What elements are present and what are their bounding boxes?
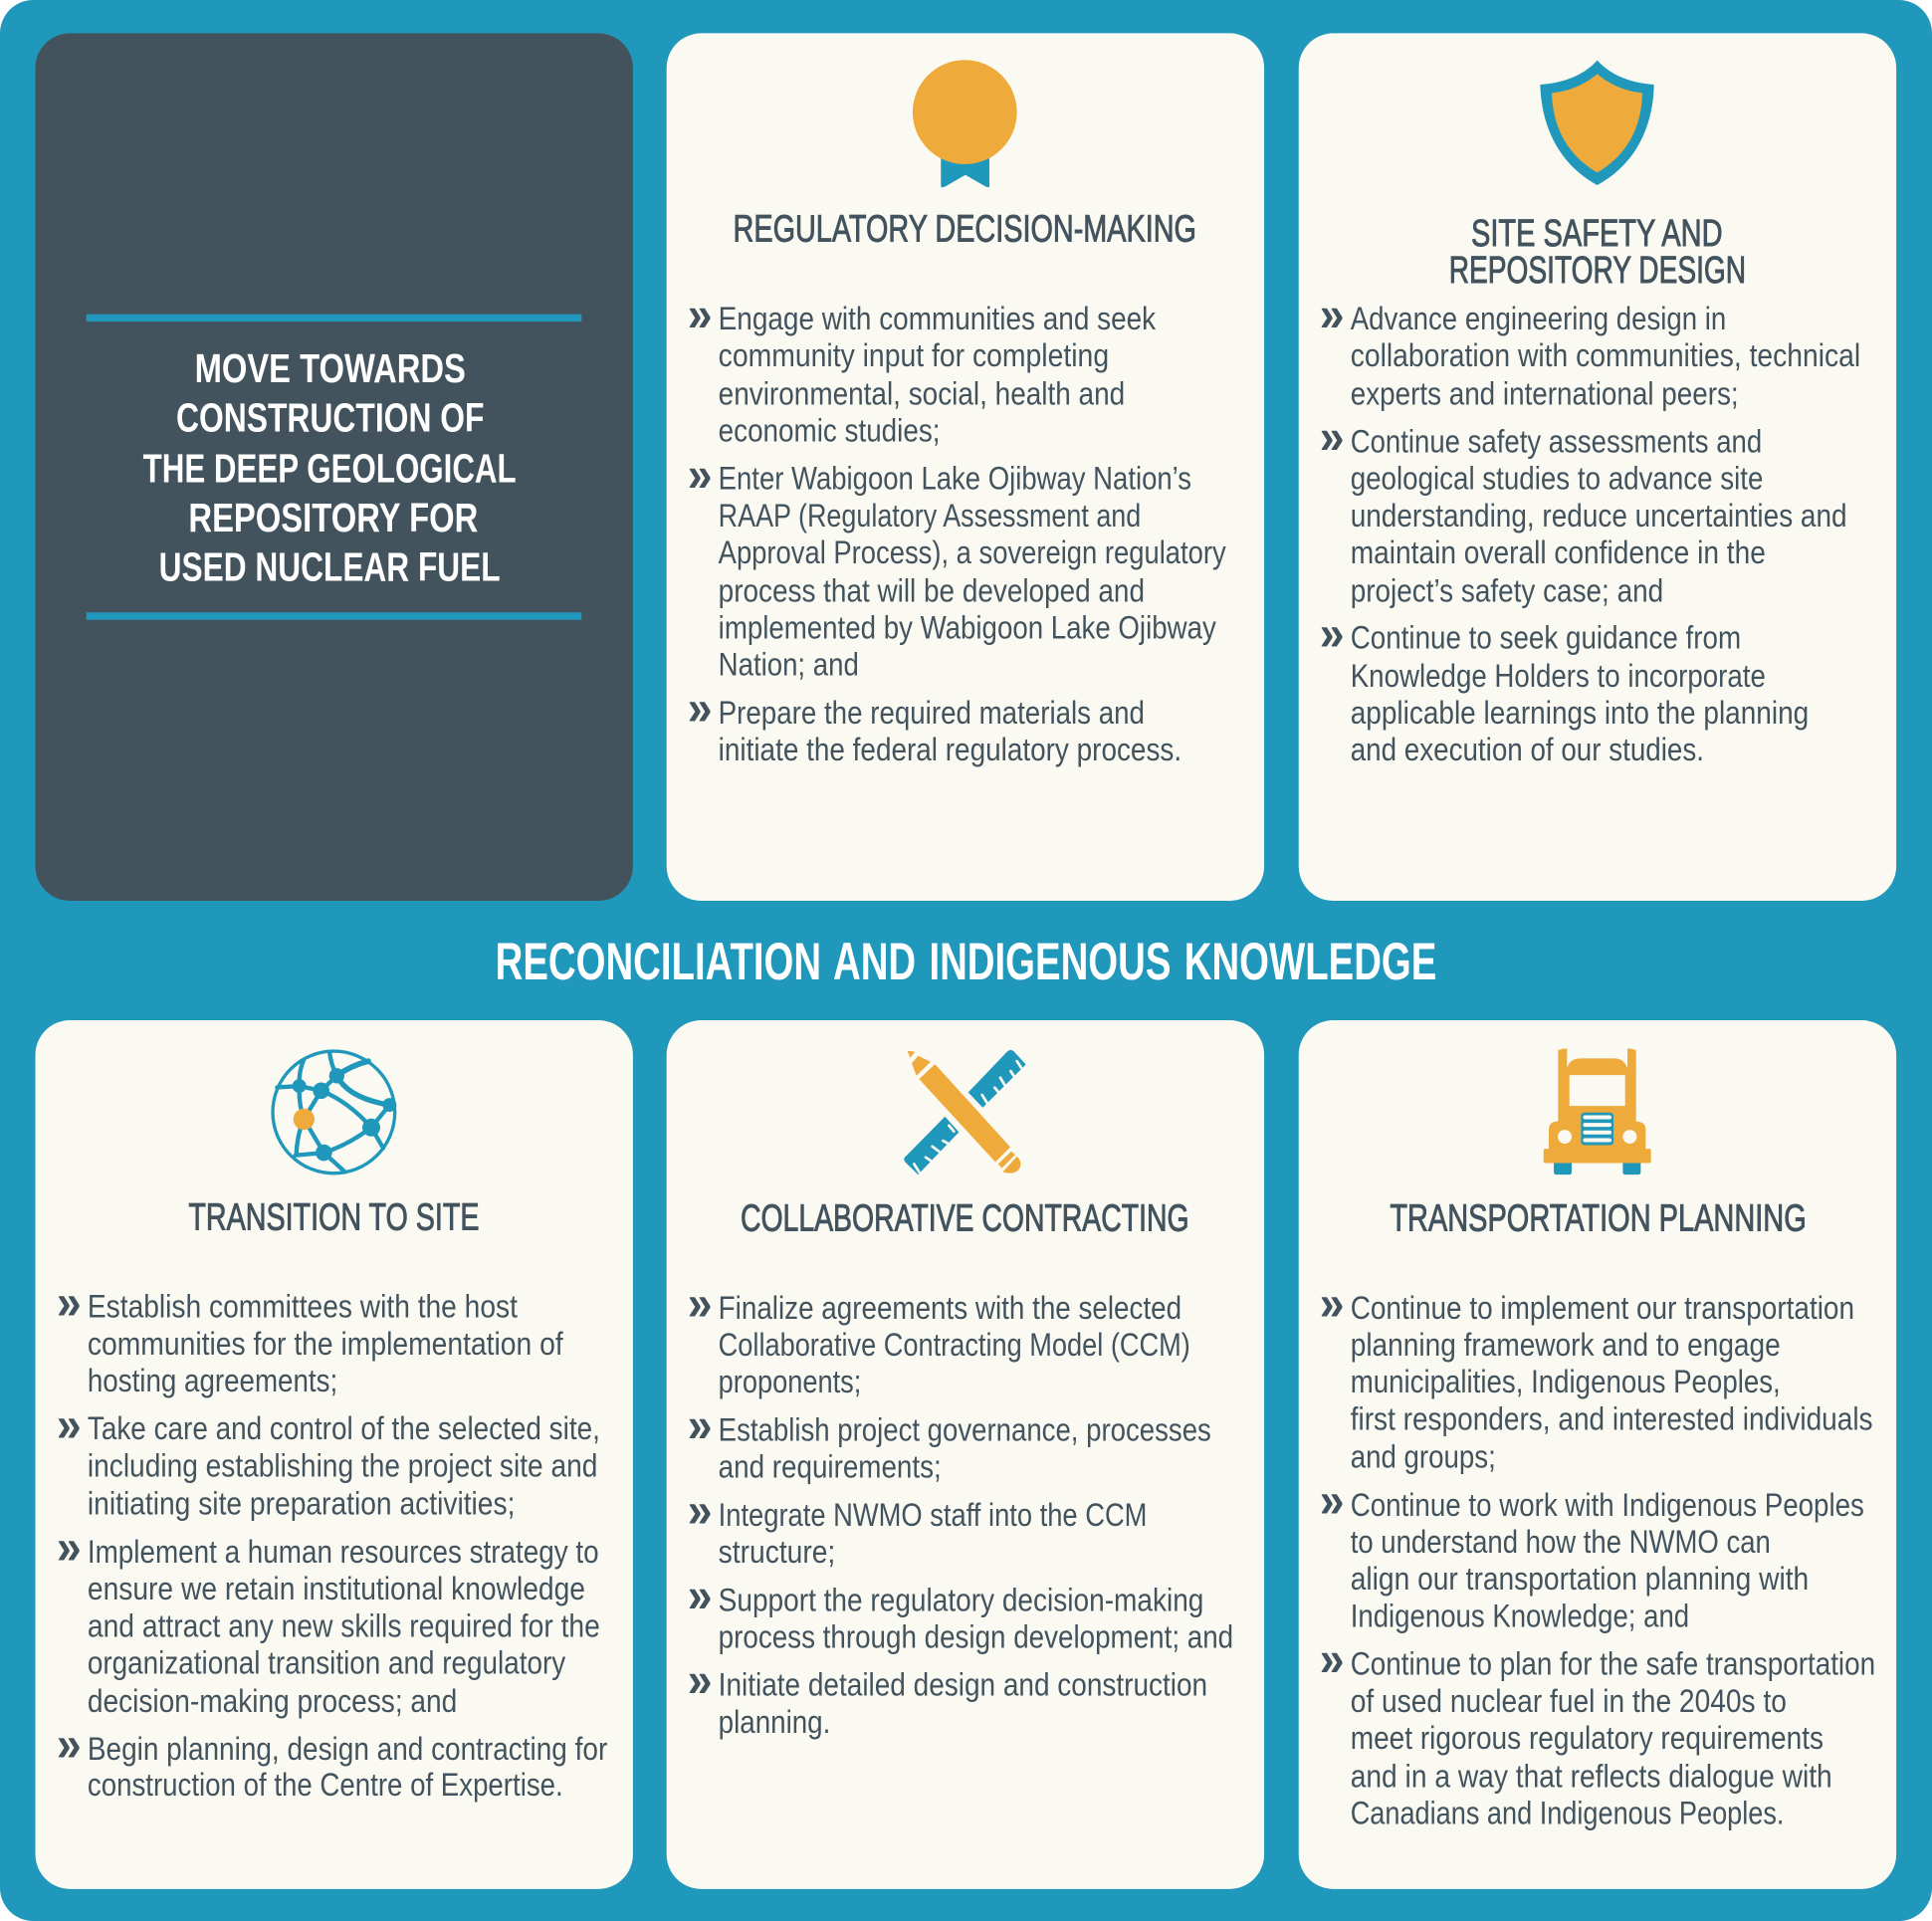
bullet 1 xyxy=(1320,287,1860,411)
heading: REGULATORY DECISION-MAKING xyxy=(734,208,1196,250)
bullet 2: » xyxy=(688,447,712,502)
panel: collaborative contracting xyxy=(667,1020,1264,1889)
bullet 1: Establish committees with the host xyxy=(88,1288,518,1325)
bullet 3: Prepare the required materials and xyxy=(719,694,1145,731)
bullet 3 xyxy=(1320,1632,1875,1830)
bullet 5: Initiate detailed design and construction xyxy=(719,1666,1207,1703)
bullet 1: collaboration with communities, technical xyxy=(1351,336,1860,373)
bullet 4: » xyxy=(688,1568,712,1622)
panel: transition to site xyxy=(36,1020,633,1889)
panel: title xyxy=(36,33,633,901)
heading: REPOSITORY DESIGN xyxy=(1449,249,1746,291)
bullet 2: initiating site preparation activities; xyxy=(88,1485,515,1522)
icon: medal xyxy=(913,60,1017,187)
bullet 1: and groups; xyxy=(1351,1438,1496,1475)
bullet 2: including establishing the project site and xyxy=(88,1446,597,1483)
bullet 1: » xyxy=(688,287,712,341)
title: REPOSITORY FOR xyxy=(188,495,478,540)
main heading: RECONCILIATION AND INDIGENOUS KNOWLEDGE xyxy=(496,933,1436,991)
heading: COLLABORATIVE CONTRACTING xyxy=(741,1197,1189,1239)
icon: pencil and ruler xyxy=(904,1050,1026,1174)
bullet 2: and requirements; xyxy=(719,1448,942,1485)
bullet 3: » xyxy=(57,1520,82,1575)
bullet 4 xyxy=(57,1717,607,1803)
bullet 2: » xyxy=(1320,1473,1345,1528)
heading: SITE SAFETY AND xyxy=(1471,212,1723,254)
bullet 1: hosting agreements; xyxy=(88,1362,337,1398)
bullet 1: Collaborative Contracting Model (CCM) xyxy=(719,1326,1190,1363)
bullet 1: » xyxy=(57,1275,82,1330)
heading: TRANSITION TO SITE xyxy=(188,1195,480,1237)
icon: shield xyxy=(1540,61,1654,185)
bullet 3: Knowledge Holders to incorporate xyxy=(1351,657,1766,694)
bullet 3: » xyxy=(688,681,712,736)
bullet 5 xyxy=(688,1653,1207,1740)
bullet 1: planning framework and to engage xyxy=(1351,1326,1781,1363)
bullet 1: Continue to implement our transportation xyxy=(1351,1289,1854,1326)
bullet 3: meet rigorous regulatory requirements xyxy=(1351,1719,1824,1756)
bullet 4: process through design development; and xyxy=(719,1617,1233,1654)
bullet 2: geological studies to advance site xyxy=(1351,460,1763,497)
title: USED NUCLEAR FUEL xyxy=(159,543,501,589)
bullet 1: community input for completing xyxy=(719,336,1109,373)
bullet 2: process that will be developed and xyxy=(719,571,1145,608)
bullet 1 xyxy=(688,287,1157,448)
bullet 1: environmental, social, health and xyxy=(719,374,1125,411)
bullet 1: Engage with communities and seek xyxy=(719,300,1157,336)
bullet list xyxy=(688,287,1226,767)
icon: truck xyxy=(1544,1048,1651,1174)
bullet 2: Enter Wabigoon Lake Ojibway Nation’s xyxy=(719,460,1191,497)
panel: transportation planning xyxy=(1299,1020,1896,1889)
title: CONSTRUCTION OF xyxy=(176,395,484,441)
bullet 2: maintain overall confidence in the xyxy=(1351,534,1766,570)
bullet 2: to understand how the NWMO can xyxy=(1351,1523,1771,1560)
bullet 3: ensure we retain institutional knowledge xyxy=(88,1570,585,1606)
title: THE DEEP GEOLOGICAL xyxy=(143,445,517,491)
bullet 2: project’s safety case; and xyxy=(1351,571,1663,608)
bullet 2: implemented by Wabigoon Lake Ojibway xyxy=(719,609,1216,646)
bullet 2 xyxy=(1320,1473,1864,1633)
bullet 1 xyxy=(1320,1276,1873,1475)
bullet 4: » xyxy=(57,1717,82,1772)
bullet 2: » xyxy=(688,1397,712,1452)
bullet 1: » xyxy=(1320,1276,1345,1331)
bullet 1: » xyxy=(688,1276,712,1331)
title xyxy=(143,345,517,589)
bullet 2 xyxy=(57,1397,600,1522)
panel: site safety and repository design xyxy=(1299,33,1896,901)
bullet list xyxy=(688,1276,1233,1740)
title: MOVE TOWARDS xyxy=(195,345,466,391)
bullet list xyxy=(1320,1276,1875,1830)
heading: TRANSPORTATION PLANNING xyxy=(1390,1197,1807,1239)
bullet 1: Finalize agreements with the selected xyxy=(719,1289,1181,1326)
bullet 2: Establish project governance, processes xyxy=(719,1410,1211,1447)
bullet 5: planning. xyxy=(719,1703,830,1740)
bullet 4: construction of the Centre of Expertise. xyxy=(88,1766,563,1803)
bullet 3: and attract any new skills required for the xyxy=(88,1606,600,1643)
bullet 2: Indigenous Knowledge; and xyxy=(1351,1597,1689,1633)
bullet 2: understanding, reduce uncertainties and xyxy=(1351,497,1847,534)
bullet 3: and execution of our studies. xyxy=(1351,731,1704,767)
bullet 3 xyxy=(688,681,1181,767)
bullet 3: structure; xyxy=(719,1533,835,1570)
bullet 3: » xyxy=(1320,1632,1345,1687)
bullet 1: experts and international peers; xyxy=(1351,374,1739,411)
bullet 3: » xyxy=(1320,606,1345,661)
bullet 4 xyxy=(688,1568,1233,1654)
bullet list xyxy=(57,1275,607,1803)
bullet 2: » xyxy=(1320,410,1345,465)
bullet 3: organizational transition and regulatory xyxy=(88,1643,566,1680)
bullet 3: Canadians and Indigenous Peoples. xyxy=(1351,1794,1784,1830)
bullet 3: Integrate NWMO staff into the CCM xyxy=(719,1496,1147,1533)
bullet 3: initiate the federal regulatory process. xyxy=(719,731,1181,767)
bullet 1: » xyxy=(1320,287,1345,341)
bullet 2: RAAP (Regulatory Assessment and xyxy=(719,497,1141,534)
bullet 1: economic studies; xyxy=(719,411,941,448)
bullet 5: » xyxy=(688,1653,712,1708)
icon: network globe xyxy=(273,1051,396,1174)
bullet 2: align our transportation planning with xyxy=(1351,1560,1809,1597)
bullet 1 xyxy=(688,1276,1190,1399)
bullet 1: communities for the implementation of xyxy=(88,1325,563,1362)
bullet 1 xyxy=(57,1275,563,1398)
bullet 2 xyxy=(1320,410,1847,608)
bullet 2: » xyxy=(57,1397,82,1452)
bullet 2 xyxy=(688,1397,1211,1485)
bullet 3 xyxy=(1320,606,1809,767)
bullet 1: municipalities, Indigenous Peoples, xyxy=(1351,1363,1781,1399)
bullet 2: Approval Process), a sovereign regulatory xyxy=(719,534,1226,570)
bullet 3: Implement a human resources strategy to xyxy=(88,1533,599,1570)
bullet 3: » xyxy=(688,1483,712,1538)
bullet 3: of used nuclear fuel in the 2040s to xyxy=(1351,1682,1787,1719)
bullet 2 xyxy=(688,447,1226,683)
bullet 1: Advance engineering design in xyxy=(1351,300,1726,336)
bullet 3: decision-making process; and xyxy=(88,1682,457,1719)
bullet 4: Begin planning, design and contracting for xyxy=(88,1730,607,1767)
bullet list xyxy=(1320,287,1860,767)
bullet 2: Nation; and xyxy=(719,646,859,683)
bullet 3: and in a way that reflects dialogue with xyxy=(1351,1757,1832,1794)
bullet 3: Continue to seek guidance from xyxy=(1351,618,1741,655)
bullet 4: Support the regulatory decision-making xyxy=(719,1581,1203,1617)
bullet 3 xyxy=(57,1520,600,1719)
bullet 2: Continue safety assessments and xyxy=(1351,423,1762,460)
bullet 3: applicable learnings into the planning xyxy=(1351,694,1809,731)
bullet 2: Take care and control of the selected site, xyxy=(88,1409,600,1446)
panel: regulatory decision-making xyxy=(667,33,1264,901)
bullet 3 xyxy=(688,1483,1147,1570)
bullet 1: proponents; xyxy=(719,1363,861,1399)
heading xyxy=(1449,212,1746,291)
